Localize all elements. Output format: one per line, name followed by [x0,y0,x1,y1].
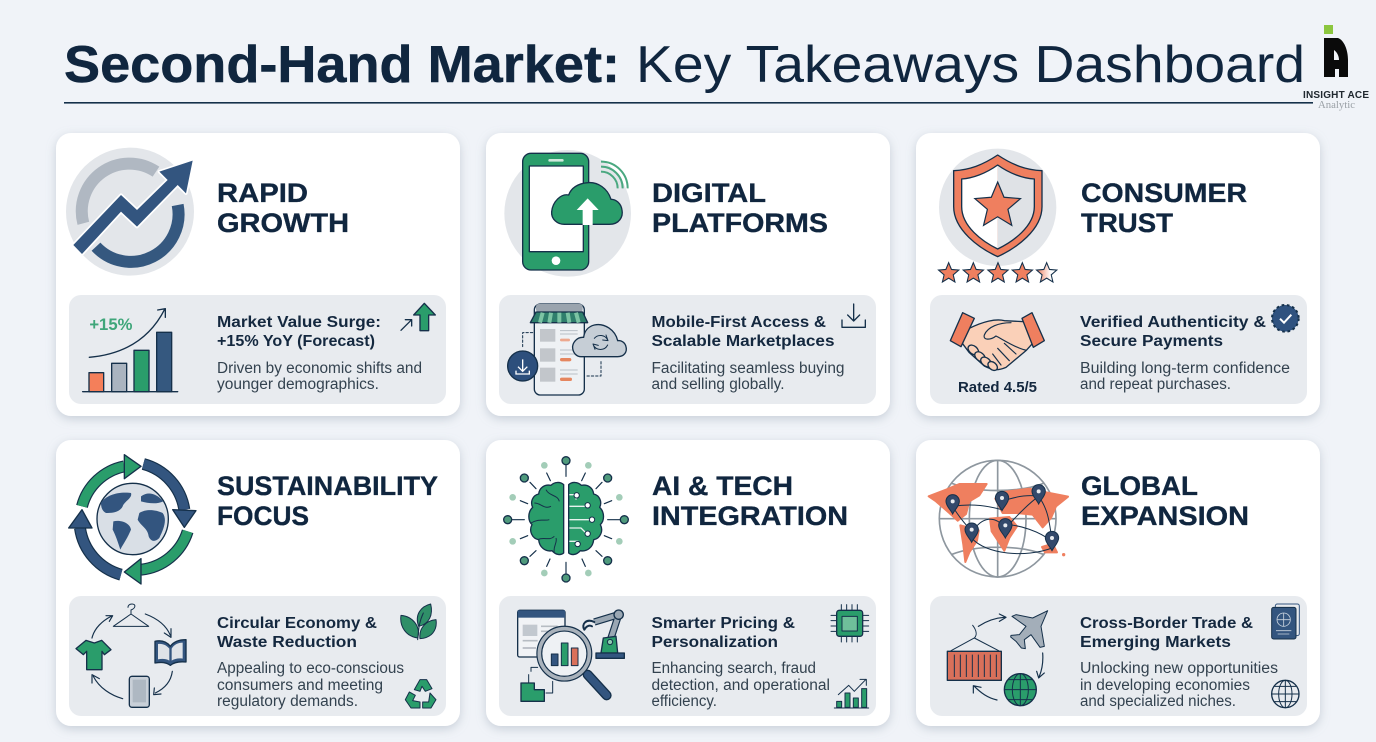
text block [1080,615,1278,710]
text block: detection, and operational [652,677,830,694]
text block: Mobile-First Access & [652,314,826,331]
bar chart: +15% [83,309,178,392]
icon: passport [1272,604,1299,639]
panel: sustainability focus [56,440,1320,726]
heading: RAPID [217,178,308,208]
text block: Waste Reduction [217,634,357,651]
heading [217,178,349,238]
heading [217,471,438,531]
icon: circular economy loop [76,604,186,707]
heading [1081,471,1249,531]
rating label: Rated 4.5/5 [958,379,1037,396]
heading [1081,178,1247,238]
text block [1080,314,1290,393]
title: Key Takeaways Dashboard [636,36,1305,94]
icon: wire globe [1272,680,1299,708]
text block: Market Value Surge: [217,314,381,331]
sub-panel [930,596,1307,716]
sub-panel [930,295,1307,404]
text block [217,314,422,393]
panel: consumer trust [916,133,1320,416]
heading: TRUST [1081,208,1174,238]
sub-panel [499,596,876,716]
heading: PLATFORMS [652,208,828,238]
heading: AI & TECH [652,471,793,501]
text block: regulatory demands. [217,693,358,710]
heading: GROWTH [217,208,349,238]
text block: and repeat purchases. [1080,376,1231,393]
icon: handshake [950,313,1044,372]
text block: Emerging Markets [1080,634,1231,651]
text block: Building long-term confidence [1080,360,1290,377]
bar chart: +15%: +15% [89,315,133,334]
text block: Cross-Border Trade & [1080,615,1253,632]
heading: DIGITAL [652,178,766,208]
panel: global expansion [916,440,1320,726]
text block: Appealing to eco-conscious [217,660,404,677]
logo: Insight Ace Analytic: INSIGHT ACE [1303,90,1369,101]
heading: GLOBAL [1081,471,1198,501]
text block: younger demographics. [217,376,379,393]
text block: and specialized niches. [1080,693,1236,710]
icon: AI brain [504,457,628,582]
text block: in developing economies [1080,677,1250,694]
icon: verified badge [1272,305,1299,332]
text block: efficiency. [652,693,717,710]
icon: container, plane and globe trade loop [947,611,1048,706]
panel: rapid growth [56,133,460,416]
text block: Smarter Pricing & [652,615,795,632]
icon: growth arrow in ring [66,148,194,276]
text block: Personalization [652,634,778,651]
text block: Circular Economy & [217,615,377,632]
icon: leaves [401,604,436,640]
text block: Facilitating seamless buying [652,360,844,377]
title: Second-Hand Market: [64,36,620,94]
logo: Insight Ace Analytic: Analytic [1318,100,1356,111]
text block: Driven by economic shifts and [217,360,422,377]
title [64,36,1305,94]
icon: mini trend chart [834,679,869,708]
sub-panel [69,596,446,716]
panel: AI and tech integration [486,440,890,726]
text block [217,615,404,710]
text block: consumers and meeting [217,677,383,694]
text block: Enhancing search, fraud [652,660,816,677]
icon: up arrows [401,303,435,331]
text block [652,314,844,393]
text block: +15% YoY (Forecast) [217,333,375,350]
heading: FOCUS [217,501,309,531]
heading: INTEGRATION [652,501,848,531]
heading [652,471,848,531]
sub-panel [69,295,446,404]
icon: chip [831,605,869,642]
logo: Insight Ace Analytic [1303,25,1369,111]
icon: phone with cloud upload [504,150,631,277]
heading [652,178,828,238]
text block: Secure Payments [1080,333,1223,350]
icon: shield with star rating [939,149,1057,282]
icon: recycle [405,680,436,708]
heading: CONSUMER [1081,178,1247,208]
text block [652,615,830,710]
text block: Verified Authenticity & [1080,314,1266,331]
icon: globe with circular arrows [69,455,196,584]
panel: digital platforms [486,133,890,416]
text block: Unlocking new opportunities [1080,660,1278,677]
text block: Scalable Marketplaces [652,333,835,350]
heading: EXPANSION [1081,501,1249,531]
icon: world map with pins [929,460,1068,577]
icon: analytics magnifier and robot arm [518,610,624,701]
text block: and selling globally. [652,376,784,393]
icon: marketplace phone [508,304,626,395]
heading: SUSTAINABILITY [217,471,438,501]
sub-panel [499,295,876,404]
icon: download [842,304,865,327]
